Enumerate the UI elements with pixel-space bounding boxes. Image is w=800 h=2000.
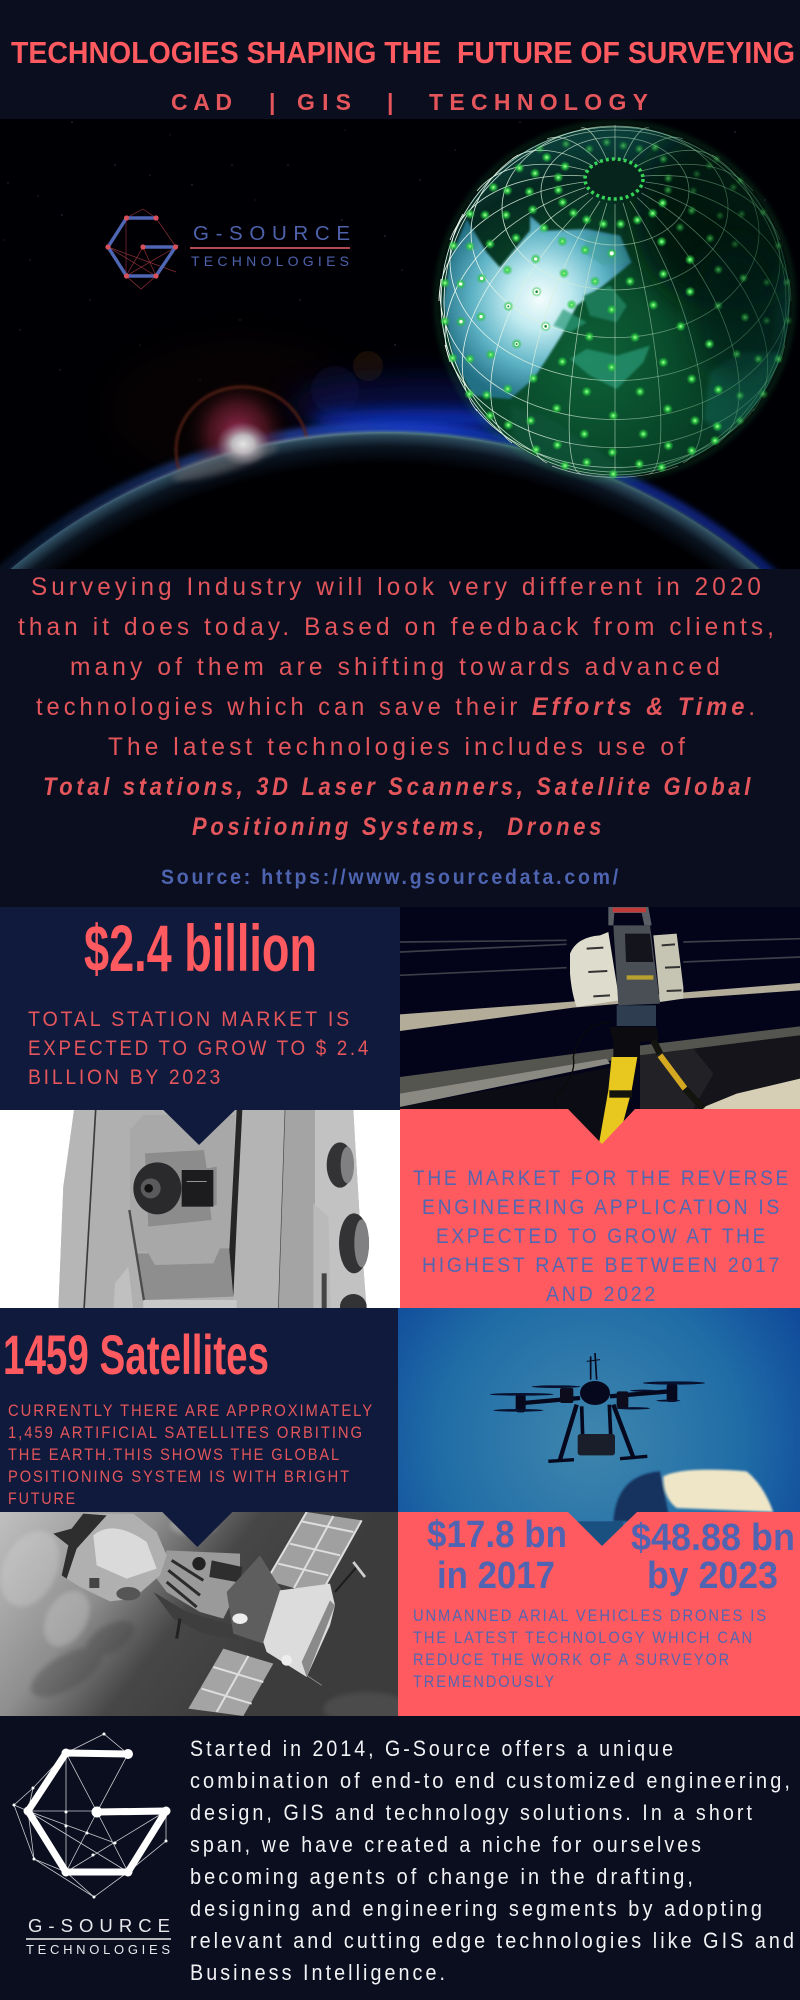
- panel: satellites stat: POSITIONING SYSTEM IS WITH BRIGHT: [8, 1467, 351, 1486]
- navy notch: [163, 1110, 235, 1145]
- intro panel: [0, 569, 800, 907]
- polar cap: [584, 159, 644, 199]
- mesh: parallels: [439, 125, 791, 477]
- blurred car: [613, 1470, 773, 1521]
- footer panel: [0, 1716, 800, 2000]
- intro panel: The latest technologies includes use of: [108, 733, 689, 761]
- satellite body: [53, 1514, 365, 1685]
- hero image: space scene: [0, 119, 800, 569]
- source line: Source: https://www.gsourcedata.com/: [161, 866, 621, 889]
- clouds: [2, 1521, 217, 1647]
- company description: becoming agents of change in the drafting,: [190, 1864, 696, 1889]
- flare red glow and ring: [192, 389, 287, 460]
- panel: drones market: $48.88 bn: [631, 1517, 795, 1559]
- mesh nodes: [440, 137, 793, 479]
- company description: Started in 2014, G-Source offers a unique: [190, 1736, 676, 1761]
- subtitle: CAD | GIS | Technology: |: [269, 89, 275, 115]
- footer logo: G-SOURCE: [28, 1915, 170, 1936]
- lens ghosts: [353, 351, 383, 381]
- scanner: [570, 932, 619, 1007]
- camera plate: [145, 1150, 217, 1227]
- subtitle: CAD | GIS | Technology: GIS: [297, 89, 351, 115]
- planet limb: [10, 432, 760, 569]
- panel: drones market: REDUCE THE WORK OF A SURVEYOR: [413, 1650, 731, 1669]
- description: TOTAL STATION MARKET IS: [28, 1008, 352, 1031]
- panel: satellites stat: CURRENTLY THERE ARE APPROXIMATELY: [8, 1401, 374, 1420]
- company description: span, we have created a niche for ourselves: [190, 1832, 704, 1857]
- description: EXPECTED TO GROW TO $ 2.4: [28, 1037, 371, 1060]
- navy notch: [162, 1512, 232, 1547]
- subtitle: CAD | GIS | Technology: CAD: [171, 89, 232, 115]
- panel: total station market stat: [0, 907, 400, 1110]
- panel: satellites stat: FUTURE: [8, 1489, 77, 1508]
- panel: reverse engineering: AND 2022: [546, 1282, 658, 1306]
- photo: satellite over earth: [0, 1512, 410, 1725]
- panel: satellites stat: 1,459 ARTIFICIAL SATELLITES ORBITING: [8, 1423, 364, 1442]
- panel: total station photo: [0, 1110, 400, 1319]
- atmosphere glow: [290, 377, 560, 433]
- bright nodes: [459, 251, 614, 346]
- big number: $2.4 billion: [84, 911, 317, 985]
- knobs: [326, 1142, 348, 1188]
- description: BILLION BY 2023: [28, 1066, 223, 1089]
- subtitle: CAD | GIS | Technology: |: [387, 89, 393, 115]
- pole ring: [585, 159, 643, 199]
- company description: [190, 1736, 797, 1985]
- company description: Business Intelligence.: [190, 1960, 448, 1985]
- solar panels: [188, 1512, 362, 1716]
- panel: drones market: [398, 1512, 800, 1716]
- intro panel: many of them are shifting towards advanced: [70, 653, 724, 681]
- panel: reverse engineering: EXPECTED TO GROW AT THE: [436, 1224, 768, 1248]
- description: [28, 1008, 371, 1089]
- subtitle: CAD | GIS | Technology: [171, 89, 648, 115]
- flare core: [218, 423, 268, 465]
- intro panel: than it does today. Based on feedback from clients,: [18, 613, 778, 641]
- intro panel: Positioning Systems, Drones: [192, 813, 605, 841]
- central face: [130, 1115, 235, 1265]
- panel: reverse engineering: [400, 1109, 800, 1308]
- panel: drones market: $17.8 bn: [427, 1514, 567, 1556]
- drone: [490, 1353, 705, 1461]
- panel: drones market: THE LATEST TECHNOLOGY WHICH CAN: [413, 1628, 754, 1647]
- photo: laser scanner on steps: [400, 907, 800, 1147]
- panel: satellites stat: [0, 1308, 398, 1512]
- hero logo: TECHNOLOGIES: [191, 253, 349, 269]
- panel: drones market: TREMENDOUSLY: [413, 1672, 556, 1691]
- hero logo: [105, 209, 350, 289]
- photo: drone in the sky: [398, 1308, 800, 1553]
- intro panel: Surveying Industry will look very different in 2020: [31, 573, 765, 601]
- mesh: meridians: [614, 125, 616, 477]
- hero logo: G-SOURCE: [193, 222, 350, 245]
- panel: drones market: in 2017: [437, 1555, 555, 1597]
- intro panel: technologies which can save their Efforts & Time.: [36, 693, 759, 721]
- footer logo: [12, 1732, 171, 1957]
- panel: satellites stat: THE EARTH.THIS SHOWS THE GLOBAL: [8, 1445, 341, 1464]
- globe: [437, 120, 800, 479]
- header band: [11, 36, 795, 115]
- subtitle: CAD | GIS | Technology: TECHNOLOGY: [429, 89, 648, 115]
- warm haze: [200, 380, 201, 381]
- top-right shade: [635, 120, 800, 310]
- footer logo: TECHNOLOGIES: [26, 1942, 170, 1957]
- panel: drones market: by 2023: [647, 1555, 778, 1597]
- stars: [4, 121, 766, 381]
- lit ocean and land, drawn in crop coordinates: [443, 216, 783, 472]
- panel: satellites stat: 1459 Satellites: [3, 1323, 269, 1386]
